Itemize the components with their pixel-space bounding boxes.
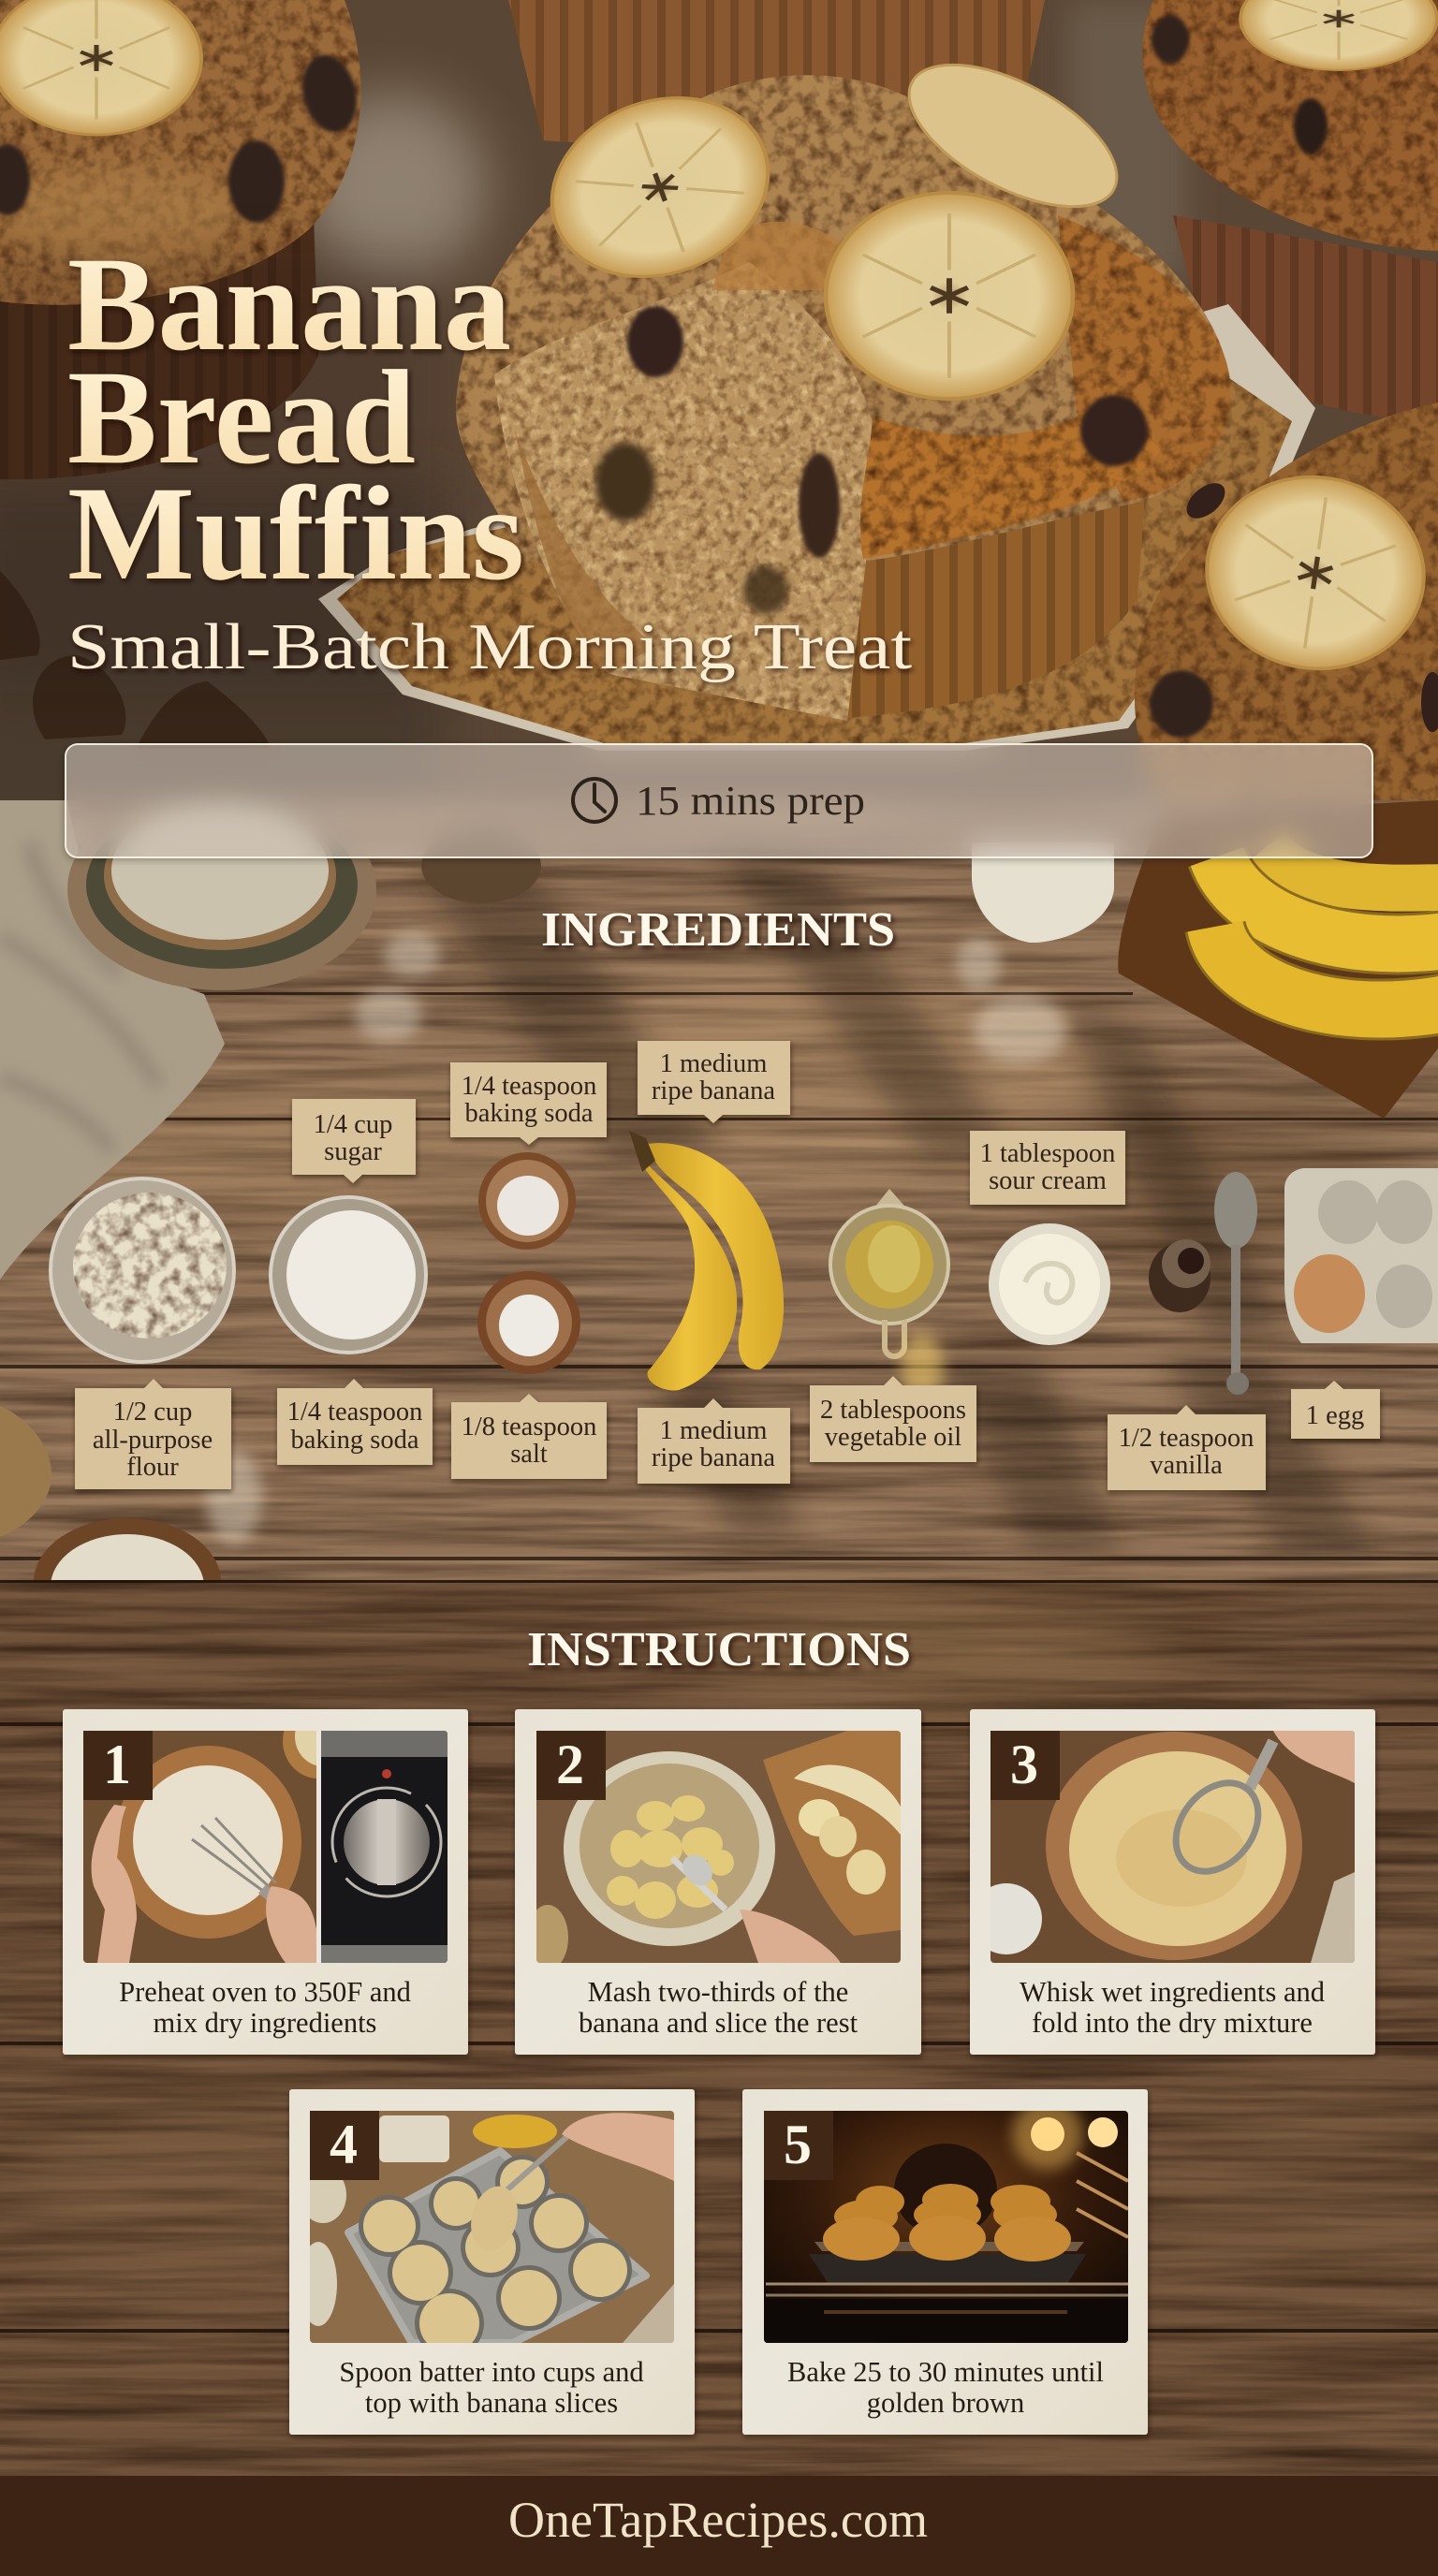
step 4 caption: top with banana slices [365, 2387, 618, 2419]
vanilla bottle [1149, 1239, 1211, 1312]
label: sugar [292, 1099, 416, 1183]
label: banana top: 1 medium [660, 1049, 767, 1078]
sour cream bowl [989, 1223, 1110, 1345]
hero: muffin photo backdrop [0, 0, 1438, 861]
top right muffin [1142, 0, 1438, 421]
step 1 caption: mix dry ingredients [154, 2007, 376, 2039]
main muffin [456, 36, 1230, 721]
chocolate chips [0, 571, 271, 749]
label: banana bottom: 1 medium [660, 1416, 767, 1445]
step 2 caption: Mash two-thirds of the [588, 1976, 848, 2008]
cutting board with bananas [1118, 800, 1438, 1119]
prep time bar [65, 743, 1373, 858]
bottom right muffin [1135, 402, 1438, 805]
step card 5 [742, 2089, 1148, 2435]
step 2 caption: banana and slice the rest [579, 2007, 858, 2039]
step 5 badge [764, 2111, 833, 2180]
milk jar [972, 842, 1114, 943]
label: salt [451, 1394, 607, 1479]
label: baking soda bottom: 1/4 teaspoon [287, 1398, 422, 1427]
label: sour cream: sour cream [989, 1166, 1107, 1195]
label: banana bottom [638, 1398, 790, 1484]
bottom left jar [0, 1406, 51, 1537]
cloth [0, 800, 225, 1280]
label: banana top: ripe banana [652, 1076, 775, 1105]
label: vegetable oil: vegetable oil [825, 1423, 961, 1452]
prep time text: 15 mins prep [636, 778, 865, 824]
step card 2 [515, 1709, 921, 2055]
label: flour: 1/2 cup [113, 1398, 192, 1427]
salt bowl [477, 1271, 580, 1374]
step 1 caption: Preheat oven to 350F and [119, 1976, 411, 2008]
label: baking soda top: 1/4 teaspoon [462, 1072, 596, 1101]
label: salt: 1/8 teaspoon [462, 1412, 596, 1442]
bottom left flour bowl [34, 1518, 221, 1646]
step 4 caption: Spoon batter into cups and [339, 2356, 644, 2388]
heading: instructions: INSTRUCTIONS [527, 1623, 911, 1676]
label: sugar: sugar [324, 1137, 382, 1166]
sugar bowl [271, 1197, 426, 1353]
step 1 caption [119, 1976, 411, 2039]
step 1 badge: 1 [103, 1734, 131, 1795]
step card 3 [970, 1709, 1375, 2055]
left muffin [0, 0, 364, 479]
step 5 badge: 5 [784, 2114, 812, 2175]
step 3 image [971, 1731, 1355, 1963]
title [67, 230, 524, 608]
label: banana bottom: ripe banana [652, 1443, 775, 1472]
label: flour: all-purpose [93, 1426, 213, 1455]
label: egg: 1 egg [1306, 1401, 1364, 1430]
baking soda bowl [478, 1152, 576, 1250]
step 3 caption: Whisk wet ingredients and [1020, 1976, 1325, 2008]
step 4 image [300, 2111, 674, 2358]
label: flour [75, 1379, 231, 1489]
step card 1 [63, 1704, 468, 2055]
label: vegetable oil [810, 1376, 976, 1462]
label: sugar: 1/4 cup [314, 1110, 392, 1139]
step 5 image [764, 2099, 1128, 2343]
title: Banana [67, 230, 511, 379]
step 1 image [83, 1704, 448, 1963]
bananas [629, 1131, 784, 1391]
egg carton [1284, 1168, 1438, 1343]
title: Muffins [67, 460, 524, 608]
step 2 image [527, 1731, 901, 1970]
step 5 caption [787, 2356, 1104, 2419]
label: flour: flour [126, 1453, 179, 1482]
step 3 caption [1020, 1976, 1325, 2039]
step 2 caption [579, 1976, 858, 2039]
label: baking soda top [450, 1062, 607, 1145]
plank seams [0, 992, 1438, 1560]
panel: ingredients backdrop [0, 788, 1438, 1646]
step 2 badge: 2 [556, 1734, 584, 1795]
step 5 caption: golden brown [867, 2387, 1024, 2419]
step card 4 [289, 2089, 695, 2435]
flour dust [206, 932, 1067, 1544]
label: vegetable oil: 2 tablespoons [820, 1396, 966, 1425]
label: baking soda top: baking soda [465, 1099, 594, 1128]
step 3 caption: fold into the dry mixture [1032, 2007, 1313, 2039]
bowls top left [67, 788, 376, 990]
subtitle: Small-Batch Morning Treat [67, 611, 913, 683]
back muffin wrapper [508, 0, 1045, 143]
step 3 badge: 3 [1010, 1734, 1038, 1795]
title: Bread [67, 344, 416, 492]
footer site name: OneTapRecipes.com [508, 2492, 928, 2548]
label: baking soda bottom: baking soda [291, 1426, 419, 1455]
label: vanilla [1108, 1405, 1266, 1490]
label: sour cream [970, 1131, 1125, 1205]
flour bowl [51, 1178, 234, 1362]
footer [0, 2476, 1438, 2576]
heading: ingredients: INGREDIENTS [541, 903, 895, 957]
step 1 badge [83, 1731, 153, 1800]
label: salt: salt [510, 1440, 548, 1469]
step 2 badge [536, 1731, 606, 1800]
main muffin paper [318, 304, 1315, 751]
step 4 caption [339, 2356, 644, 2419]
label: vanilla: 1/2 teaspoon [1119, 1424, 1254, 1453]
spoon [1214, 1172, 1257, 1395]
label: baking soda bottom [277, 1379, 433, 1465]
label: banana top [638, 1041, 790, 1123]
step 5 caption: Bake 25 to 30 minutes until [787, 2356, 1104, 2388]
step 3 badge [990, 1731, 1060, 1800]
label: egg [1291, 1381, 1380, 1439]
label: sour cream: 1 tablespoon [980, 1139, 1115, 1168]
oil cup [830, 1189, 948, 1400]
step 4 badge [310, 2111, 379, 2180]
label: vanilla: vanilla [1150, 1451, 1223, 1480]
icon: clock [573, 779, 616, 822]
step 4 badge: 4 [330, 2114, 358, 2175]
panel: instructions backdrop [0, 1580, 1438, 2479]
small jar lid [421, 828, 541, 903]
